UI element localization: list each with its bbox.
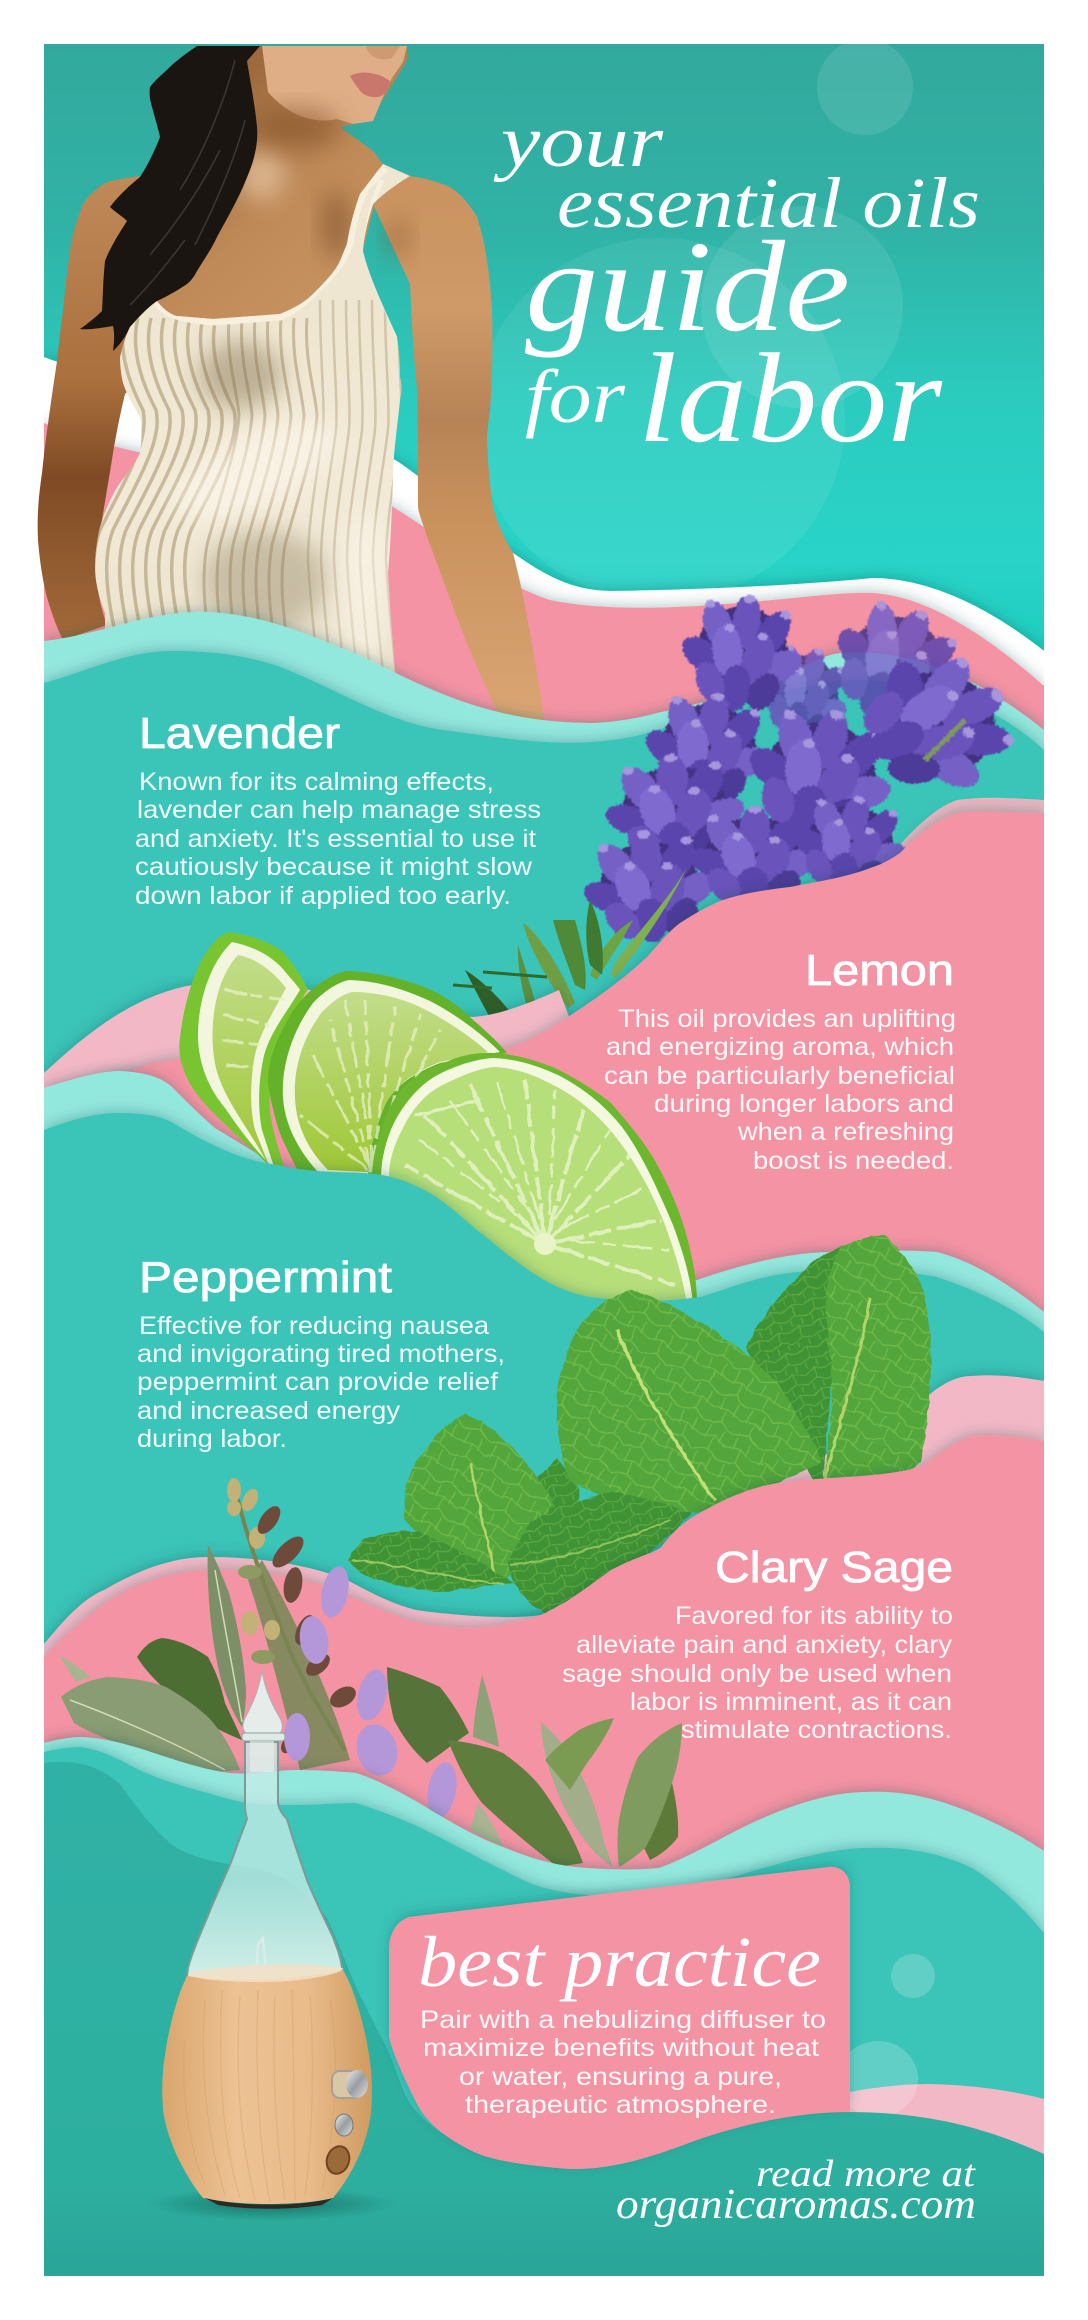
lemon body: can be particularly beneficial <box>604 1062 955 1090</box>
mint bottom left leaf <box>348 1531 514 1592</box>
pale pink wave behind lime <box>44 982 600 1100</box>
lemon body: when a refreshing <box>737 1118 954 1146</box>
small button <box>335 2114 353 2136</box>
header bubbles <box>475 39 913 602</box>
glass neck <box>250 1741 274 1772</box>
title: labor <box>638 327 943 469</box>
bottom sprig <box>571 823 728 950</box>
peppermint body <box>137 1312 505 1453</box>
lavender body <box>135 768 541 910</box>
lower right sprig <box>779 787 921 901</box>
teal wave 2 <box>44 1113 1044 1800</box>
pale teal wave 2 <box>44 1071 1044 1600</box>
mint bottom middle leaf <box>508 1492 692 1613</box>
title: guide <box>525 215 850 359</box>
lavender body: down labor if applied too early. <box>135 882 511 910</box>
lavender body: lavender can help manage stress <box>137 796 541 824</box>
wooden base <box>162 1970 372 2204</box>
lavender text block <box>135 709 541 910</box>
peppermint body: during labor. <box>137 1425 287 1453</box>
peppermint body: peppermint can provide relief <box>137 1368 498 1396</box>
lavender body: cautiously because it might slow <box>135 853 533 881</box>
lower middle sprig <box>683 806 827 908</box>
bottom bubbles <box>838 1954 935 2117</box>
lemon body: and energizing aroma, which <box>606 1033 954 1061</box>
peppermint body: and invigorating tired mothers, <box>137 1340 505 1368</box>
read more call to action: read more at <box>756 2153 977 2195</box>
best practice body <box>420 2006 826 2119</box>
face <box>262 46 407 124</box>
mint small dark leaf <box>538 1457 580 1520</box>
clary sage body: alleviate pain and anxiety, clary <box>576 1631 953 1659</box>
peppermint text block <box>137 1253 505 1453</box>
lemon body: boost is needed. <box>753 1147 954 1175</box>
teal wave 1 <box>44 643 1044 1073</box>
shoulder shadow <box>386 216 410 260</box>
best practice heading: best practice <box>418 1922 821 2002</box>
torso skin <box>140 46 407 320</box>
glass stopper <box>243 1671 282 1736</box>
lime slice 1 <box>179 932 308 1175</box>
best practice body: Pair with a nebulizing diffuser to <box>420 2006 826 2034</box>
peppermint heading: Peppermint <box>139 1253 392 1302</box>
teal wave 3 <box>44 1747 1044 2276</box>
title: for <box>525 355 625 439</box>
glass nozzle <box>255 1938 267 1985</box>
title: your <box>493 101 664 183</box>
mint centre leaf <box>557 1290 822 1513</box>
clary sage body: sage should only be used when <box>562 1660 952 1688</box>
lemon body: This oil provides an uplifting <box>618 1005 956 1033</box>
clary sage body: stimulate contractions. <box>681 1716 952 1744</box>
white wave <box>44 354 1044 686</box>
best practice body: therapeutic atmosphere. <box>465 2091 776 2119</box>
stem detail <box>925 720 965 760</box>
woman <box>38 46 545 725</box>
best practice text block <box>418 1922 826 2119</box>
best practice body: maximize benefits without heat <box>423 2034 819 2062</box>
lavender body: and anxiety. It's essential to use it <box>135 825 536 853</box>
pale pink wave 3 <box>44 1375 1044 1800</box>
base felt <box>205 2198 333 2209</box>
dark teal wave <box>44 1762 1044 2276</box>
lower left sprig <box>595 750 755 872</box>
clary sage text block <box>562 1543 953 1744</box>
diffuser shadow <box>147 2187 397 2221</box>
lemon body: during longer labors and <box>654 1090 954 1118</box>
pink lemon panel <box>44 812 1044 1400</box>
dress <box>94 164 410 695</box>
right arm <box>373 164 545 725</box>
chest highlight <box>238 149 286 201</box>
lavender body: Known for its calming effects, <box>139 768 494 796</box>
clary sage body <box>562 1602 953 1744</box>
vent hole <box>323 2143 353 2177</box>
clary sage body: Favored for its ability to <box>675 1602 953 1630</box>
pink wave <box>44 417 1044 730</box>
title: essential oils <box>557 163 980 243</box>
nose <box>366 46 400 59</box>
best practice body: or water, ensuring a pure, <box>459 2063 782 2091</box>
lime slice 2 <box>268 971 507 1178</box>
lavender illustration <box>583 593 1016 943</box>
lemon text block <box>604 946 956 1175</box>
wood grain <box>184 1990 335 2202</box>
sage plant <box>59 1478 682 1867</box>
pale pink band right <box>850 2084 1044 2160</box>
peppermint body: Effective for reducing nausea <box>139 1312 489 1340</box>
left arm <box>38 176 148 638</box>
glass vessel <box>186 1742 345 1985</box>
lips <box>350 73 390 97</box>
main right sprig <box>831 627 1042 822</box>
best practice panel shape <box>389 1867 850 2169</box>
silver knob <box>332 2070 368 2098</box>
rosemary leaves <box>453 867 687 1050</box>
clary sage heading: Clary Sage <box>715 1543 953 1592</box>
lime slices <box>179 932 697 1320</box>
read more call to action <box>616 2153 977 2228</box>
pink wave 4 <box>44 1435 1044 1900</box>
lavender heading: Lavender <box>139 709 340 758</box>
lemon body <box>604 1005 956 1175</box>
hair <box>80 46 260 351</box>
mint right leaf <box>747 1235 931 1495</box>
left sprig <box>644 692 761 800</box>
wood top highlight <box>188 1965 343 1982</box>
sage leaves right <box>387 1667 682 1867</box>
title <box>493 101 980 469</box>
pale band above lemon panel <box>900 798 1044 849</box>
top sprig <box>681 593 802 712</box>
clary sage body: labor is imminent, as it can <box>630 1688 952 1716</box>
centre sprig <box>726 691 914 857</box>
sage leaves left <box>59 1545 246 1775</box>
rear sprigs <box>768 600 958 729</box>
sage flower stalk <box>227 1478 461 1820</box>
peppermint body: and increased energy <box>137 1397 401 1425</box>
strap shadow on chest <box>322 191 350 259</box>
jaw shadow <box>252 108 340 148</box>
panel artwork layers <box>44 39 1044 900</box>
mint leaves <box>348 1235 931 1613</box>
pale teal wave 1 <box>44 603 1044 750</box>
diffuser <box>147 1671 397 2221</box>
read more call to action: organicaromas.com <box>616 2182 976 2228</box>
mint left lower leaf <box>404 1413 553 1580</box>
lemon heading: Lemon <box>805 946 954 995</box>
pale teal wave 3 <box>44 1737 1044 2300</box>
lime slice 3 <box>372 1053 697 1320</box>
glass collar <box>242 1733 285 1741</box>
